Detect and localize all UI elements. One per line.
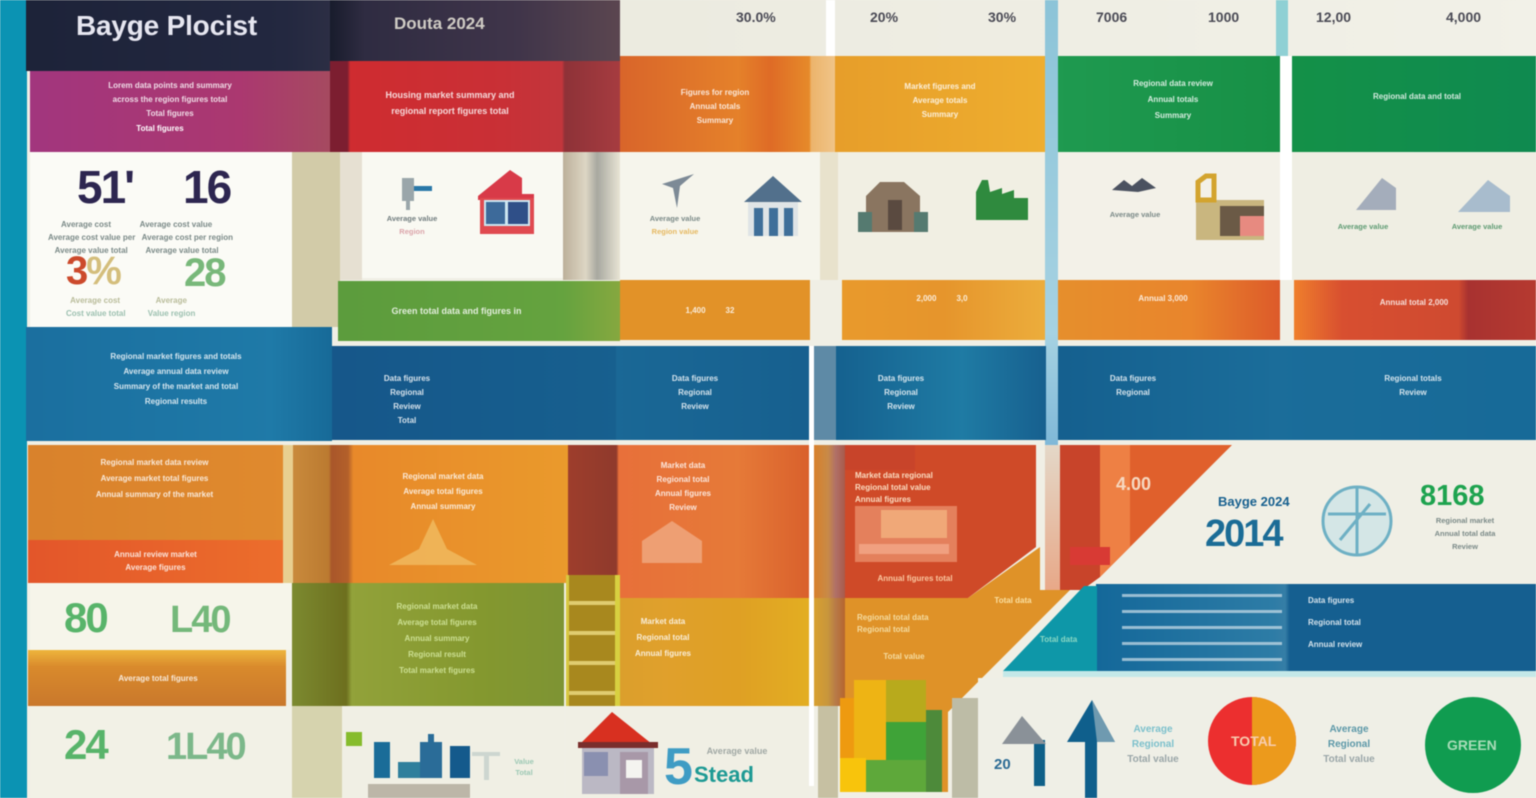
red-orange panel: Annual figures xyxy=(655,489,711,498)
red and orange circle: TOTAL xyxy=(1231,733,1277,749)
icon panel: house: Region xyxy=(399,227,425,236)
summary: purple: across the region figures total xyxy=(113,95,227,104)
panel caption: Annual figures total xyxy=(877,574,953,583)
panel text xyxy=(1308,596,1363,649)
icon panel: grey mountains: Average value xyxy=(1338,222,1388,231)
header: column labels xyxy=(620,0,1536,56)
icon: tool xyxy=(402,178,433,210)
blue panel 4: Review xyxy=(887,402,915,411)
bottom right stats xyxy=(978,678,1536,798)
icon panel: store: Average value xyxy=(1110,210,1160,219)
pale note: Value xyxy=(514,757,534,766)
header: dark title cell: Bayge Plocist xyxy=(76,10,257,41)
orange panel centre: Annual summary xyxy=(411,502,475,511)
blue panel 1: Average annual data review xyxy=(123,367,229,376)
icon panel: house: Average value xyxy=(387,214,437,223)
red-orange panel xyxy=(568,445,810,598)
summary: amber: Average totals xyxy=(913,96,967,105)
header: dark title cell xyxy=(26,0,330,71)
header: dark second cell: Douta 2024 xyxy=(394,14,485,33)
blue panel 2 xyxy=(332,346,616,440)
green figure: 8168 xyxy=(1420,480,1485,512)
grey base xyxy=(368,784,470,798)
olive panel centre xyxy=(292,583,564,706)
band: orange 1 xyxy=(620,280,810,340)
orange panel left xyxy=(28,445,283,540)
summary: red: Housing market summary and xyxy=(385,90,515,100)
summary: purple: Total figures xyxy=(146,109,194,118)
summary: green: Annual totals xyxy=(1148,95,1198,104)
left teal strip xyxy=(0,0,27,798)
summary: orange: Summary xyxy=(697,116,733,125)
olive panel centre: Annual summary xyxy=(405,634,469,643)
blue panel 3: Data figures xyxy=(672,374,718,383)
blue panel 4: Regional xyxy=(884,388,918,397)
panel text: Regional total value xyxy=(855,483,931,492)
orange panel centre: Regional market data xyxy=(403,472,483,481)
band: orange 2: 2,000 3,0 xyxy=(916,294,968,303)
band: green xyxy=(338,281,620,341)
icon panel: blue house: Region value xyxy=(652,227,698,236)
pale note xyxy=(514,757,534,777)
red-orange strip xyxy=(28,540,283,583)
blue lower panel xyxy=(1096,584,1536,671)
icon: teal globe xyxy=(1320,484,1394,558)
stat panel xyxy=(30,152,292,327)
icon: pale house chart xyxy=(642,520,702,564)
band: orange 1: 1,400 32 xyxy=(686,306,734,315)
big number 5: 5 xyxy=(664,738,693,796)
header: column labels: 7006 xyxy=(1096,9,1127,25)
amber panel text: Total value xyxy=(883,652,925,661)
pale gap column xyxy=(340,152,362,280)
year number: 2014 xyxy=(1205,513,1282,555)
header: dark second cell xyxy=(330,0,620,61)
band: red xyxy=(1294,280,1536,340)
year heading: Bayge 2024 xyxy=(1218,494,1290,509)
summary: purple xyxy=(30,71,330,152)
notes: Review xyxy=(1452,542,1478,551)
icon: brown building xyxy=(857,181,929,233)
band: orange 3: Annual 3,000 xyxy=(1138,294,1188,303)
icon: grey house xyxy=(744,176,802,237)
bottom panel: house xyxy=(566,706,809,798)
icon panel: factory xyxy=(838,152,1045,280)
header: column labels: 12,00 xyxy=(1316,9,1351,25)
blue panel 5: Data figures xyxy=(1110,374,1156,383)
stat: 16: 16 xyxy=(183,161,230,213)
stat: 3%: 3% xyxy=(66,249,120,293)
summary: red: regional report figures total xyxy=(391,106,509,116)
band: orange 2 xyxy=(842,280,1045,340)
bottom pale column xyxy=(292,706,342,798)
blue panel 1: Summary of the market and total xyxy=(114,382,238,391)
stacked block chart xyxy=(839,680,943,793)
icon: pale hill xyxy=(1458,180,1510,212)
icon: house silhouette xyxy=(390,519,476,566)
summary: green: Summary xyxy=(1155,111,1191,120)
blue panel 1: Regional market figures and totals xyxy=(110,352,242,361)
icon panel: store xyxy=(1058,152,1280,280)
blue panel 4: Data figures xyxy=(878,374,924,383)
amber panel centre xyxy=(568,598,810,706)
stat panel bottom xyxy=(30,706,292,798)
stat panel lower xyxy=(30,583,292,650)
stat block lower right xyxy=(1205,480,1496,558)
amber panel text: Regional total data xyxy=(857,613,929,622)
red-orange strip: Annual review market xyxy=(114,550,197,559)
summary: orange: Annual totals xyxy=(690,102,740,111)
blue panel 2: Data figures xyxy=(384,374,430,383)
stat notes top: Average cost value per Average cost per region xyxy=(48,233,233,242)
small label: Average value xyxy=(707,746,767,756)
header: column labels: 1000 xyxy=(1208,9,1239,25)
header: column labels: 4,000 xyxy=(1446,9,1481,25)
blue panel 3: Regional xyxy=(678,388,712,397)
summary: green xyxy=(1058,56,1284,152)
note text: Regional xyxy=(1132,739,1174,750)
red and orange circle xyxy=(1207,696,1297,786)
orange strip lower: Average total figures xyxy=(118,674,198,683)
amber panel text xyxy=(856,596,1032,661)
summary: amber: Summary xyxy=(922,110,958,119)
tan gap column xyxy=(563,152,620,280)
teal triangle: Total data xyxy=(1040,635,1078,644)
icon panel: house xyxy=(362,152,563,278)
orange panel left: Regional market data review xyxy=(100,458,209,467)
stat: 24: 24 xyxy=(64,721,107,768)
note text: Average xyxy=(1133,724,1173,735)
stat: 28: 28 xyxy=(184,251,224,295)
summary: dark green xyxy=(1292,56,1536,152)
tan strip lower xyxy=(818,706,838,798)
notes: Annual total data xyxy=(1435,529,1495,538)
stat notes top: Average cost Average cost value xyxy=(61,220,212,229)
pale column xyxy=(1045,445,1060,590)
icon: red house xyxy=(477,170,535,235)
icon: small bird xyxy=(1112,178,1156,193)
mauve strip xyxy=(814,445,845,598)
teal word: Stead xyxy=(694,762,754,787)
summary: purple: Lorem data points and summary xyxy=(108,81,232,90)
blue panel 2: Regional xyxy=(390,388,424,397)
stat notes bottom: Cost value total Value region xyxy=(66,309,195,318)
icon panel: grey mountains xyxy=(1292,152,1536,280)
icon: chart box xyxy=(855,506,957,562)
blue panel 5: Regional totals xyxy=(1384,374,1442,383)
band: green: Green total data and figures in xyxy=(391,306,522,316)
blue panel 4 xyxy=(836,346,1046,440)
tan bottom column xyxy=(952,698,978,798)
stat notes bottom xyxy=(66,296,196,318)
green circle xyxy=(1424,696,1522,794)
red-orange panel: Regional total xyxy=(657,475,709,484)
amber panel centre: Market data xyxy=(641,617,685,626)
orange panel left: Annual summary of the market xyxy=(96,490,213,499)
blue panel 1 xyxy=(26,327,332,441)
panel text: Annual figures xyxy=(855,495,911,504)
blue panel 3: Review xyxy=(681,402,709,411)
band: red: Annual total 2,000 xyxy=(1380,298,1448,307)
blue panel 2: Review xyxy=(393,402,421,411)
icon: golden store xyxy=(1194,172,1265,241)
olive panel centre: Regional result xyxy=(408,650,466,659)
pale note: Total xyxy=(515,768,533,777)
blue gap strip xyxy=(814,346,836,440)
icon: green square xyxy=(346,732,362,746)
blue panel 5: Regional xyxy=(1116,388,1150,397)
olive panel centre: Average total figures xyxy=(397,618,477,627)
red panel content xyxy=(854,471,958,584)
blue panel 2: Total xyxy=(398,416,416,425)
stat notes bottom: Average cost Average xyxy=(70,296,187,305)
note text 2: Regional xyxy=(1328,739,1370,750)
amber panel text: Total data xyxy=(994,596,1032,605)
notes xyxy=(1434,516,1496,551)
summary: amber xyxy=(835,56,1045,152)
icon panel: blue house: Average value xyxy=(650,214,700,223)
blue panel 1: Regional results xyxy=(145,397,207,406)
green circle: GREEN xyxy=(1447,737,1497,753)
stat notes top xyxy=(48,220,234,256)
red-orange strip: Average figures xyxy=(125,563,186,572)
note text 2 xyxy=(1322,724,1375,765)
summary: orange xyxy=(620,56,835,152)
stat: 51: 51' xyxy=(77,161,133,213)
amber panel centre: Annual figures xyxy=(635,649,691,658)
icon: ladder xyxy=(566,575,620,706)
olive panel centre: Regional market data xyxy=(397,602,477,611)
red triangle: 4.00 xyxy=(1116,474,1151,494)
panel text: Annual review xyxy=(1308,640,1362,649)
orange panel centre xyxy=(293,445,568,583)
stat: 14: 1L40 xyxy=(166,726,245,768)
panel text xyxy=(854,471,933,504)
icon: grey arrow xyxy=(1002,716,1046,787)
header: column labels: 30% xyxy=(988,9,1016,25)
icon: big red roof house xyxy=(577,712,659,794)
panel text: Market data regional xyxy=(855,471,933,480)
orange panel centre: Average total figures xyxy=(403,487,483,496)
amber panel centre: Regional total xyxy=(637,633,689,642)
amber panel text: Regional total xyxy=(857,625,910,634)
blue panel 5 xyxy=(1058,346,1536,440)
red-orange panel: Market data xyxy=(661,461,705,470)
bottom panel: city xyxy=(342,706,564,798)
icon panel: blue house xyxy=(620,152,820,280)
blue panel 3 xyxy=(616,346,810,440)
bar lines xyxy=(1122,594,1282,662)
tan gap column 2 xyxy=(820,152,838,280)
icon: city bars xyxy=(373,733,500,780)
note text 2: Total value xyxy=(1323,754,1375,765)
notes: Regional market xyxy=(1436,516,1494,525)
beige column xyxy=(292,152,340,327)
stat: 40: L40 xyxy=(170,599,229,641)
icon: crane xyxy=(662,174,694,208)
tan strip xyxy=(283,445,293,583)
summary: red xyxy=(330,61,620,152)
note text xyxy=(1126,724,1179,765)
icon panel: grey mountains: Average value xyxy=(1452,222,1502,231)
stat: 80: 80 xyxy=(64,594,107,641)
small value: 20 xyxy=(994,756,1011,773)
olive panel centre: Total market figures xyxy=(399,666,475,675)
icon: blue arrow xyxy=(1066,700,1116,798)
header: column labels: 30.0% xyxy=(736,9,776,25)
icon: green factory xyxy=(975,179,1029,221)
blue panel 5: Review xyxy=(1399,388,1427,397)
summary: orange: Figures for region xyxy=(681,88,749,97)
panel text: Regional total xyxy=(1308,618,1361,627)
summary: dark green: Regional data and total xyxy=(1373,92,1461,101)
white gap column xyxy=(1280,56,1292,280)
stat notes top: Average value total Average value total xyxy=(55,246,219,255)
header: column labels: 20% xyxy=(870,9,898,25)
summary: purple: Total figures xyxy=(136,124,184,133)
summary: amber: Market figures and xyxy=(904,82,976,91)
summary: green: Regional data review xyxy=(1133,79,1213,88)
orange panel left: Average market total figures xyxy=(101,474,208,483)
icon: grey hill xyxy=(1356,178,1396,210)
divider: pale blue column xyxy=(1045,0,1058,445)
white rule xyxy=(809,346,814,786)
panel text: Data figures xyxy=(1308,596,1354,605)
note text: Total value xyxy=(1127,754,1179,765)
red-orange panel: Review xyxy=(669,503,697,512)
orange strip lower xyxy=(28,650,286,706)
band: orange 3 xyxy=(1058,280,1280,340)
amber strip xyxy=(814,598,845,706)
note text 2: Average xyxy=(1329,724,1369,735)
